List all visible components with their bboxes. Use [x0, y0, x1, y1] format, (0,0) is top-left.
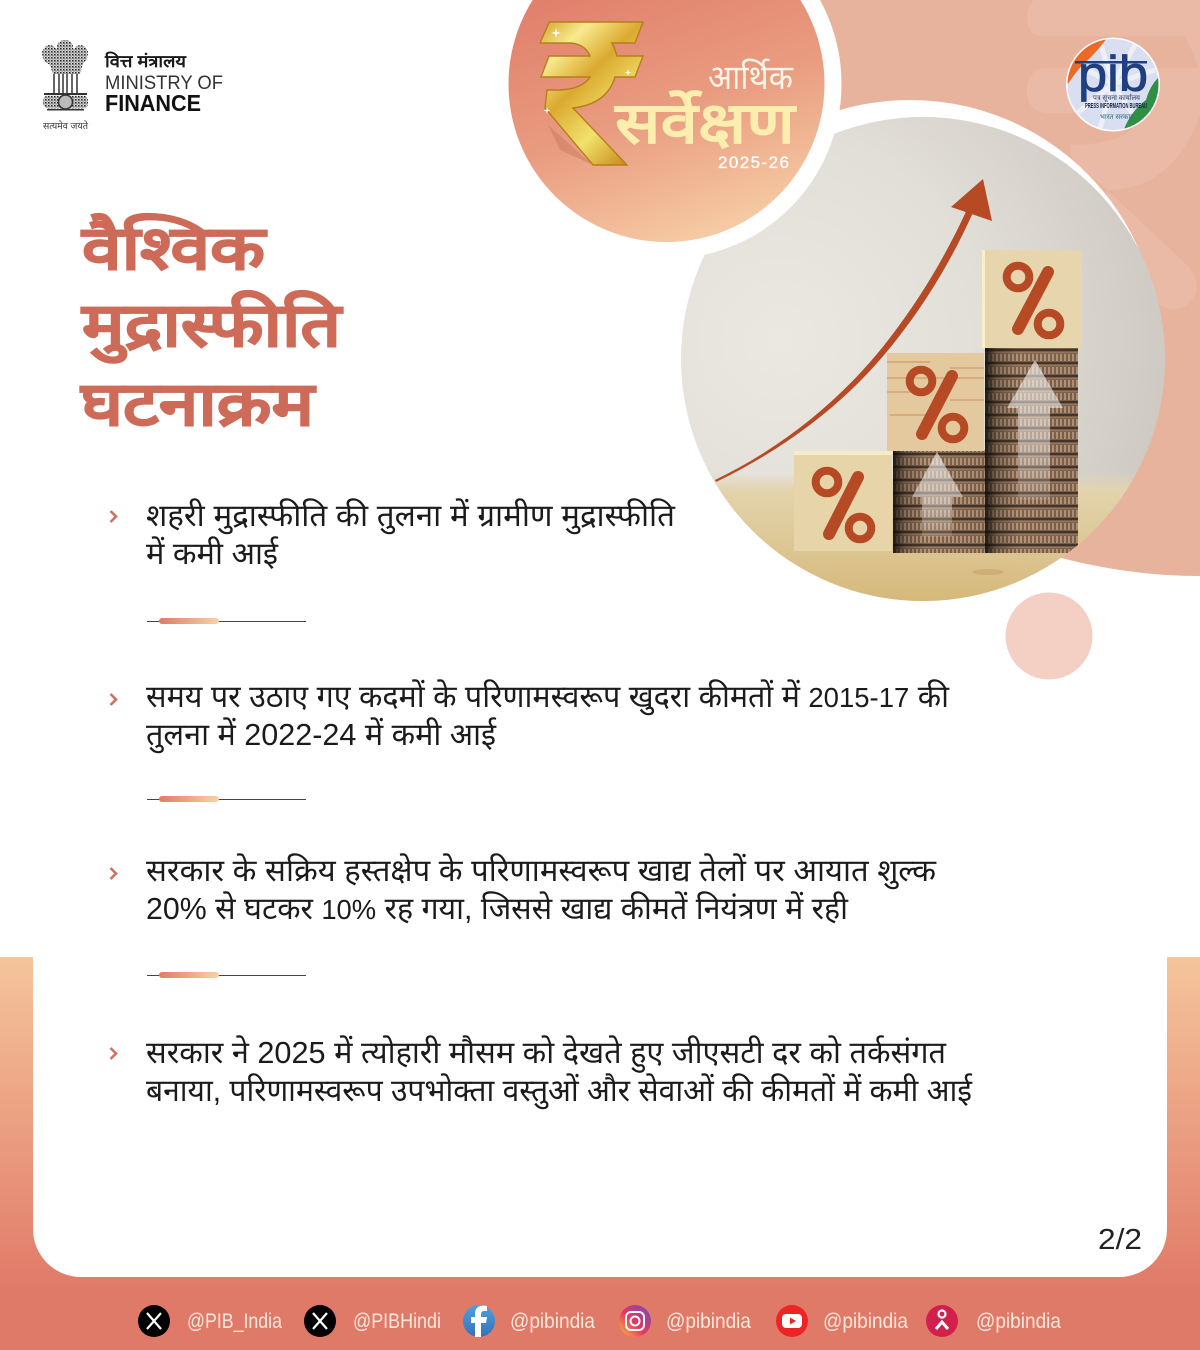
handle: YouTube: [776, 1305, 908, 1337]
watermark rupee shape: [1027, 0, 1200, 310]
bullet 3: सरकार के सक्रिय हस्तक्षेप के परिणामस्वरूप खाद्य तेलों पर आयात शुल्क: [146, 853, 937, 890]
white content panel: [33, 950, 1167, 1277]
icon: gold rupee: [540, 22, 643, 165]
rising arrow: [715, 179, 992, 482]
logo lettering: pib: [1078, 46, 1148, 102]
wooden blocks: [794, 250, 1082, 551]
badge title: सर्वेक्षण: [614, 90, 797, 156]
handle: X PIB_India: [138, 1305, 282, 1337]
logo lettering: [1075, 46, 1148, 121]
decorative small circle: [1006, 592, 1092, 680]
handle: Facebook: [463, 1305, 595, 1337]
logo lettering: पत्र सूचना कार्यालय: [1093, 93, 1141, 102]
title: वैश्विक: [81, 213, 268, 282]
handle: YouTube: @pibindia: [823, 1310, 908, 1333]
logo lettering: भारत सरकार: [1100, 114, 1133, 121]
bullet 2: तुलना में 2022-24 में कमी आई: [146, 717, 497, 754]
bullet 1: में कमी आई: [146, 536, 279, 571]
percent signs: [816, 266, 1060, 539]
bullet 4: बनाया, परिणामस्वरूप उपभोक्ता वस्तुओं और सेवाओं की कीमतों में कमी आई: [146, 1073, 973, 1110]
ministry name: [104, 51, 223, 116]
bullet 1: [110, 498, 676, 571]
handle: Koo: @pibindia: [976, 1310, 1061, 1333]
page number: 2/2: [1098, 1224, 1142, 1256]
icon: national emblem: [42, 40, 89, 132]
handle: X PIBHindi: [304, 1305, 441, 1337]
handle: X PIB_India: @PIB_India: [187, 1310, 282, 1333]
handle: Instagram: @pibindia: [666, 1310, 751, 1333]
ministry name: MINISTRY OF: [105, 72, 223, 94]
badge title: 2025-26: [718, 153, 789, 172]
bullet 3: [110, 853, 937, 926]
title: घटनाक्रम: [80, 370, 317, 438]
bullet 4: [110, 1035, 973, 1110]
ministry name: वित्त मंत्रालय: [104, 51, 187, 71]
bottom gradient band: [0, 957, 1200, 1350]
header badge: Economic Survey 2025-26: [492, 0, 842, 259]
logo lettering: PRESS INFORMATION BUREAU: [1085, 103, 1147, 110]
social media footer: [138, 1305, 1061, 1337]
bullet 2: [110, 679, 950, 754]
ministry name: FINANCE: [105, 90, 201, 116]
handle: Facebook: @pibindia: [510, 1310, 595, 1333]
separator 2: [147, 796, 306, 802]
bullet 4: सरकार ने 2025 में त्योहारी मौसम को देखते हुए जीएसटी दर को तर्कसंगत: [146, 1035, 947, 1073]
bullet 3: 20% से घटकर 10% रह गया, जिससे खाद्य कीमतें नियंत्रण में रही: [146, 891, 849, 926]
title: मुद्रास्फीति: [81, 290, 344, 364]
separator 3: [147, 972, 306, 978]
badge title: आर्थिक: [708, 58, 794, 97]
badge title: [614, 58, 797, 172]
photo: percent blocks on coin stacks: [660, 100, 1170, 607]
handle: X PIBHindi: @PIBHindi: [353, 1310, 441, 1333]
title: [80, 213, 344, 438]
handle: Instagram: [619, 1305, 751, 1337]
icon: national emblem: सत्यमेव जयते: [43, 120, 89, 132]
ministry of finance logo: [42, 40, 223, 132]
handle: Koo: [926, 1305, 1061, 1337]
PIB logo: [1064, 38, 1160, 132]
bullet 1: शहरी मुद्रास्फीति की तुलना में ग्रामीण मुद्रास्फीति: [146, 498, 676, 535]
separator 1: [147, 618, 306, 624]
bullet 2: समय पर उठाए गए कदमों के परिणामस्वरूप खुदरा कीमतों में 2015-17 की: [146, 679, 950, 716]
coin stacks: [893, 347, 1078, 553]
white up arrows over coins: [912, 360, 1063, 537]
peach background shape, top right: [800, 0, 1200, 576]
